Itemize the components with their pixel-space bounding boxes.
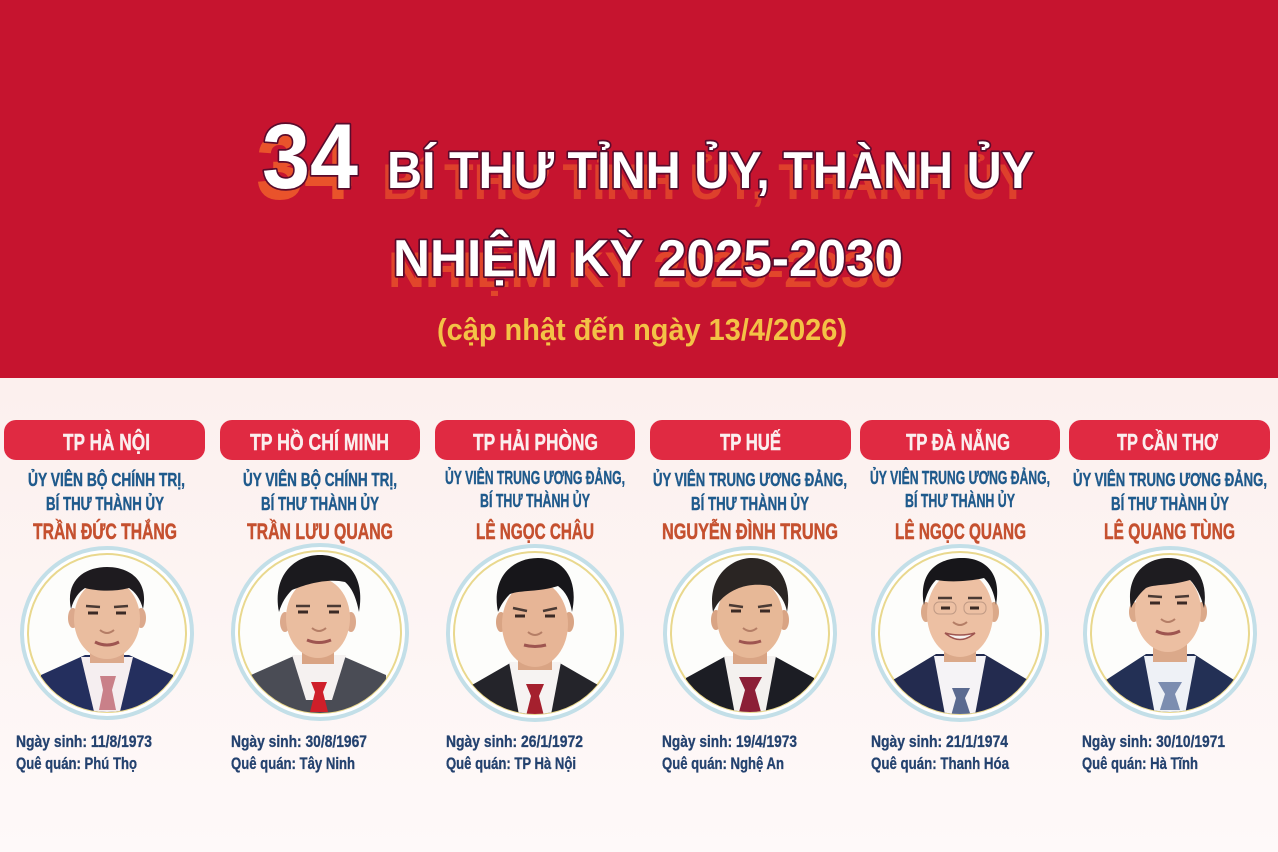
title shadow: NHIỆM KỲ 2025-2030 [388, 242, 898, 298]
city pill [650, 420, 851, 460]
title shadow: 34 [256, 117, 352, 219]
birth and hometown: Ngày sinh: 30/10/1971 [1082, 732, 1225, 751]
panel: TP Hồ Chí Minh [220, 420, 420, 773]
person name: TRẦN ĐỨC THẮNG [33, 519, 177, 544]
birth and hometown: Quê quán: Thanh Hóa [871, 754, 1009, 773]
position [870, 467, 1050, 511]
position [653, 469, 847, 514]
portrait [1085, 548, 1255, 720]
panel: TP Đà Nẵng [860, 420, 1060, 773]
city name: TP HUẾ [720, 428, 781, 455]
title number: 34 [262, 106, 358, 208]
position: BÍ THƯ THÀNH ỦY [1111, 493, 1229, 514]
birth and hometown [231, 732, 367, 773]
birth and hometown: Ngày sinh: 26/1/1972 [446, 732, 583, 751]
city pill [4, 420, 205, 460]
person name: LÊ NGỌC CHÂU [476, 519, 594, 544]
portrait [448, 546, 622, 720]
title line 1: BÍ THƯ TỈNH ỦY, THÀNH ỦY [387, 141, 1034, 200]
city name: TP HÀ NỘI [63, 428, 150, 455]
position: ỦY VIÊN BỘ CHÍNH TRỊ, [243, 469, 397, 490]
city pill [435, 420, 635, 460]
city pill [1069, 420, 1270, 460]
position [445, 467, 625, 511]
birth and hometown: Ngày sinh: 19/4/1973 [662, 732, 797, 751]
birth and hometown [871, 732, 1009, 773]
birth and hometown: Quê quán: Hà Tĩnh [1082, 754, 1198, 773]
position: BÍ THƯ THÀNH ỦY [46, 493, 164, 514]
position: ỦY VIÊN BỘ CHÍNH TRỊ, [28, 469, 185, 490]
birth and hometown: Quê quán: Nghệ An [662, 754, 784, 773]
position [243, 469, 397, 514]
position [1073, 469, 1267, 514]
position: BÍ THƯ THÀNH ỦY [691, 493, 809, 514]
position: BÍ THƯ THÀNH ỦY [480, 490, 590, 511]
birth and hometown [662, 732, 797, 773]
city name: TP HẢI PHÒNG [473, 427, 598, 455]
header band [0, 0, 1278, 378]
title shadow: BÍ THƯ TỈNH ỦY, THÀNH ỦY [382, 153, 1029, 210]
person name: NGUYỄN ĐÌNH TRUNG [662, 518, 838, 544]
city name: TP HỒ CHÍ MINH [250, 428, 389, 455]
panel: TP Hải Phòng [435, 420, 635, 773]
title shadow [256, 117, 1029, 298]
panel: TP Huế [650, 420, 851, 773]
panel: TP Hà Nội [4, 420, 205, 773]
birth and hometown: Ngày sinh: 21/1/1974 [871, 732, 1008, 751]
title line 2: NHIỆM KỲ 2025-2030 [393, 229, 903, 288]
city name: TP ĐÀ NẴNG [906, 428, 1010, 455]
portrait [665, 548, 835, 720]
birth and hometown [1082, 732, 1225, 773]
birth and hometown [16, 732, 152, 773]
position: ỦY VIÊN TRUNG ƯƠNG ĐẢNG, [445, 467, 625, 488]
city pill [220, 420, 420, 460]
birth and hometown: Quê quán: Tây Ninh [231, 754, 355, 773]
city name: TP CẦN THƠ [1117, 428, 1218, 455]
city pill [860, 420, 1060, 460]
position: BÍ THƯ THÀNH ỦY [905, 490, 1015, 511]
portrait [233, 545, 407, 720]
person name: TRẦN LƯU QUANG [247, 519, 393, 544]
subtitle: (cập nhật đến ngày 13/4/2026) [437, 312, 847, 347]
position: BÍ THƯ THÀNH ỦY [261, 493, 379, 514]
birth and hometown: Quê quán: TP Hà Nội [446, 754, 576, 773]
position: ỦY VIÊN TRUNG ƯƠNG ĐẢNG, [653, 469, 847, 490]
birth and hometown: Ngày sinh: 30/8/1967 [231, 732, 367, 751]
panel: TP Cần Thơ [1069, 420, 1270, 773]
position: ỦY VIÊN TRUNG ƯƠNG ĐẢNG, [870, 467, 1050, 488]
portrait [873, 546, 1047, 720]
birth and hometown [446, 732, 583, 773]
birth and hometown: Quê quán: Phú Thọ [16, 754, 137, 773]
person name: LÊ NGỌC QUANG [895, 519, 1026, 544]
position [28, 469, 185, 514]
portrait [22, 548, 192, 720]
birth and hometown: Ngày sinh: 11/8/1973 [16, 732, 152, 751]
